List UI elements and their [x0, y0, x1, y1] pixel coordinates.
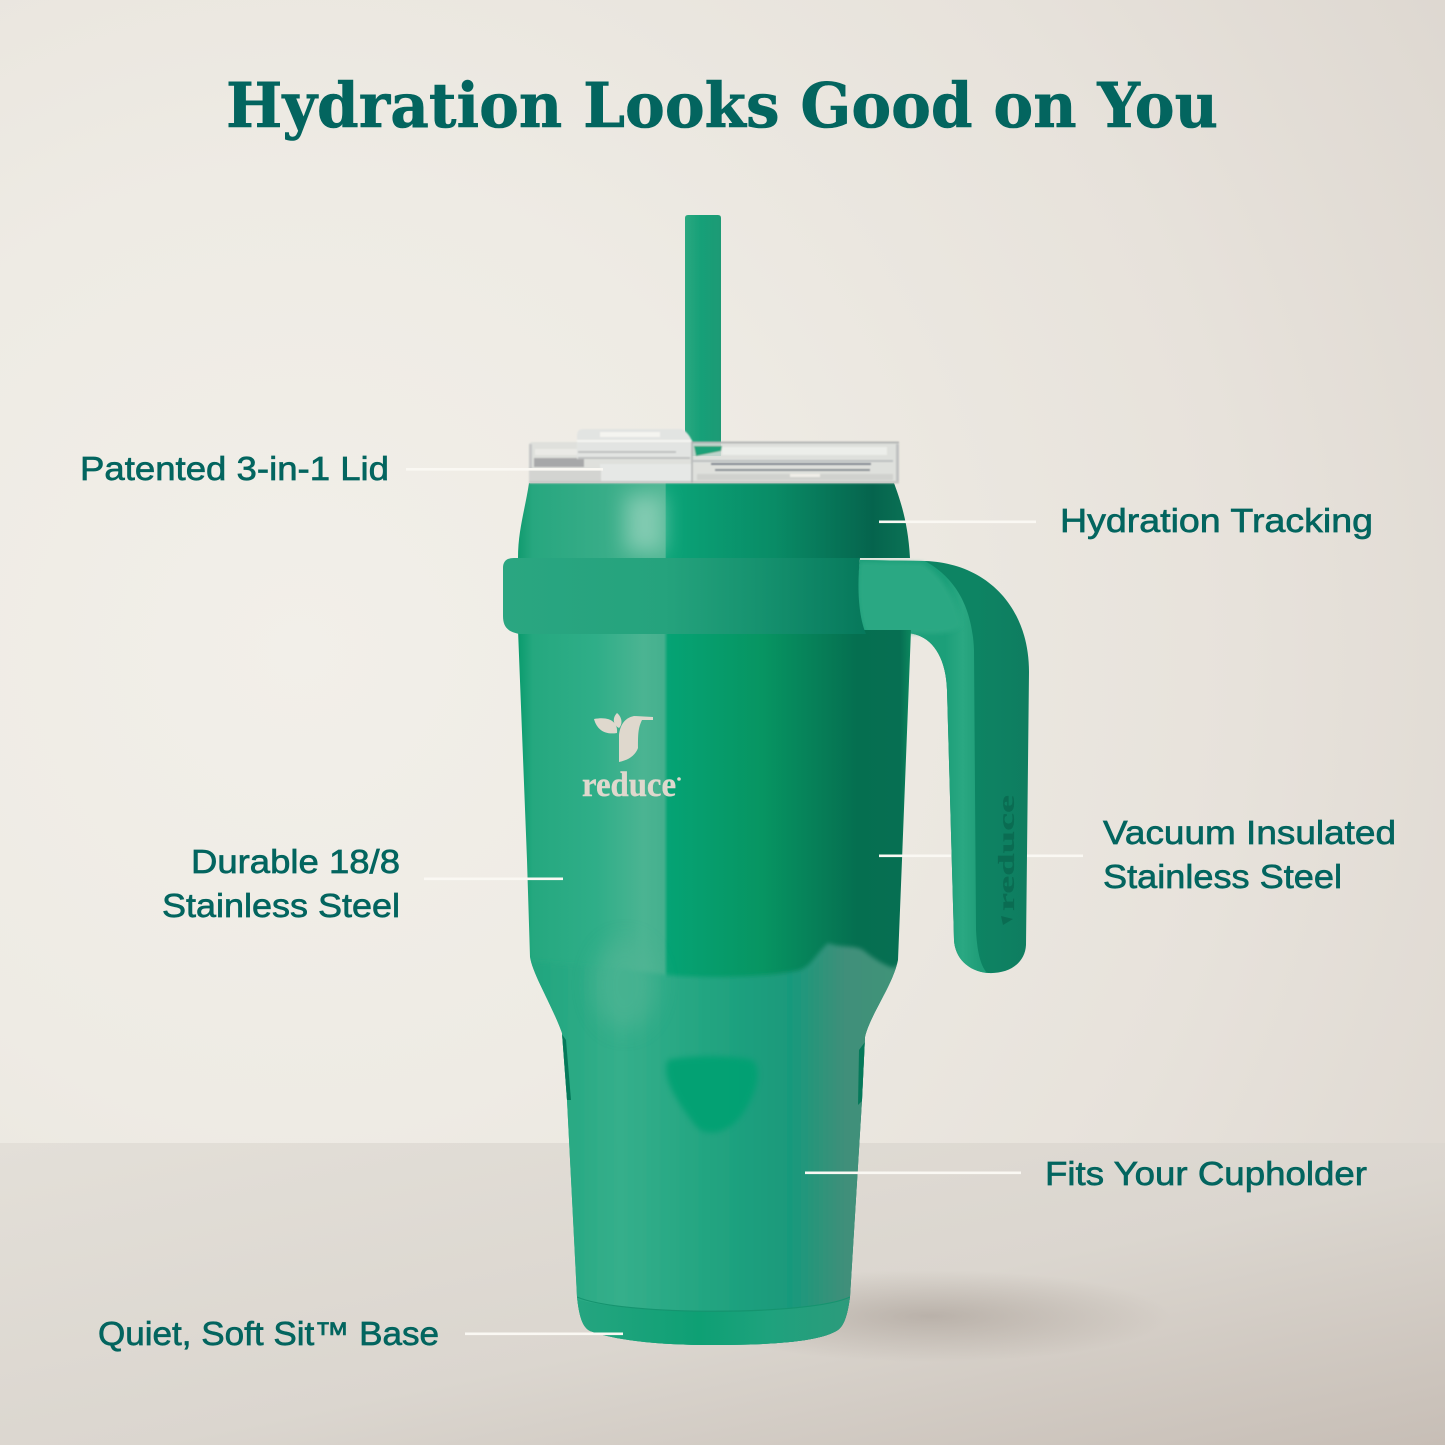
lid flip tab: [577, 429, 692, 459]
leader lines: [406, 468, 1083, 1335]
handle top highlight: [858, 562, 962, 633]
straw seen through lid: [694, 446, 722, 456]
label: Vacuum Insulated Stainless Steel: Vacuum Insulated: [1103, 814, 1396, 851]
background wall: [0, 0, 1445, 1143]
collar band: [503, 558, 866, 634]
base ring: [577, 1299, 850, 1345]
highlight on upper section: [625, 495, 664, 552]
reduce logo: [582, 713, 681, 804]
soft highlight continuing to taper: [593, 940, 657, 1030]
straw: [685, 215, 721, 456]
tumbler body: [510, 625, 920, 1355]
label: Vacuum Insulated Stainless Steel: Stainless Steel: [1103, 858, 1342, 895]
label: Durable 18/8 Stainless Steel: Stainless Steel: [162, 887, 400, 924]
side reflections: [562, 1034, 571, 1100]
label: Durable 18/8 Stainless Steel: Durable 18/8: [191, 843, 400, 880]
label: Quiet, Soft Sit Base: Quiet, Soft Sit™ Base: [98, 1315, 439, 1352]
clear lid: [529, 429, 899, 484]
label: Fits Your Cupholder: Fits Your Cupholder: [1045, 1155, 1367, 1192]
title: Hydration Looks Good on You: [226, 69, 1218, 142]
label: Hydration Tracking: Hydration Tracking: [1060, 502, 1373, 539]
reduce logo: reduce: [582, 765, 676, 804]
main wall: [510, 625, 920, 1355]
floor surface: [0, 1143, 1445, 1445]
handle engraved logo: reduce: [994, 795, 1019, 911]
upper section: [518, 483, 910, 558]
reflection patch: [666, 1056, 758, 1133]
label: Durable 18/8 Stainless Steel: [162, 843, 400, 924]
lower taper: [530, 942, 897, 1345]
cast shadow: [690, 1270, 1170, 1362]
label: Vacuum Insulated Stainless Steel: [1103, 814, 1396, 895]
handle engraved logo: [994, 795, 1019, 925]
handle: [858, 560, 1029, 973]
label: Patented 3-in-1 Lid: Patented 3-in-1 Lid: [80, 450, 389, 487]
tumbler product illustration: [503, 215, 1029, 1355]
